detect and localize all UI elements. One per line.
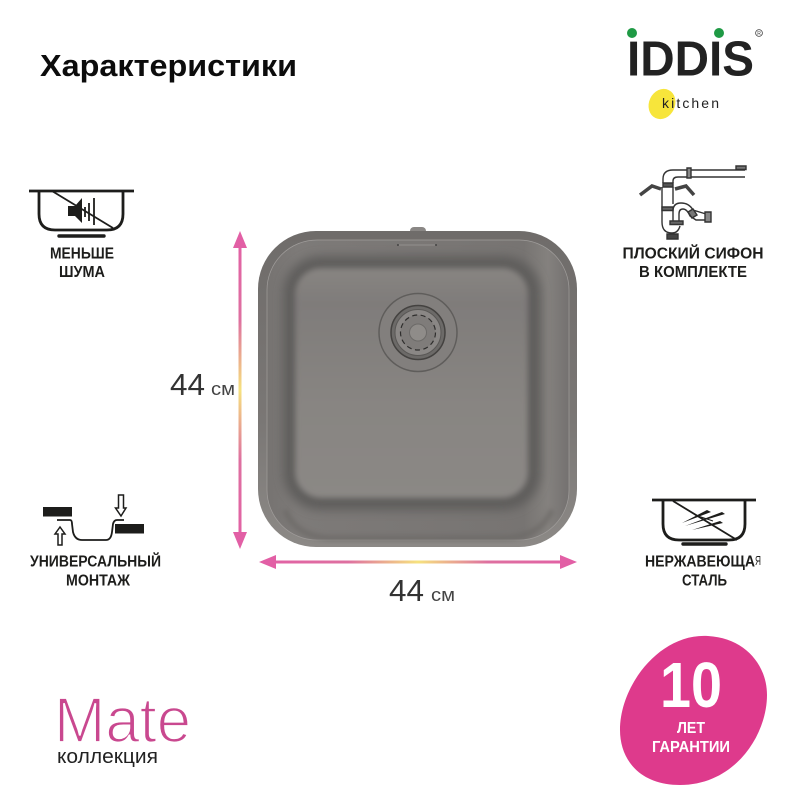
sink illustration — [258, 227, 577, 547]
logo: IDDIS kitchen: IDDIS — [627, 32, 754, 86]
warranty badge — [620, 636, 767, 785]
arrow: width — [259, 555, 577, 569]
arrow: height — [233, 231, 247, 549]
text: flat siphon: ПЛОСКИЙ СИФОН — [622, 244, 764, 262]
logo: IDDIS kitchen — [627, 28, 762, 124]
text: stainless steel: СТАЛЬ — [682, 572, 727, 590]
icon: less noise — [29, 191, 134, 236]
text: universal mounting: УНИВЕРСАЛЬНЫЙ — [30, 552, 161, 570]
text: universal mounting — [30, 552, 161, 590]
text: stainless steel — [645, 553, 761, 590]
text: stainless steel: Я — [755, 553, 761, 568]
label: height 44 cm: 44 — [170, 367, 205, 402]
warranty badge: 10 — [660, 649, 722, 721]
text: less noise — [50, 246, 114, 281]
drain — [379, 294, 457, 372]
label: width 44 cm: 44 — [389, 573, 424, 608]
label: width 44 cm: см — [431, 585, 455, 605]
text: stainless steel: НЕРЖАВЕЮЩА — [645, 554, 755, 570]
logo: IDDIS kitchen: kitchen — [662, 95, 719, 111]
icon: flat siphon — [640, 166, 746, 239]
text: flat siphon — [622, 244, 764, 281]
warranty badge: ГАРАНТИИ — [652, 739, 730, 756]
label: height 44 cm — [170, 367, 235, 402]
label: height 44 cm: см — [211, 379, 235, 399]
icon: stainless steel — [652, 500, 756, 544]
text: flat siphon: В КОМПЛЕКТЕ — [639, 264, 747, 281]
label: width 44 cm — [389, 573, 455, 608]
collection name: Mate — [54, 684, 191, 756]
text: universal mounting: МОНТАЖ — [66, 572, 131, 590]
logo: IDDIS kitchen: R — [757, 31, 761, 37]
text: less noise: МЕНЬШЕ — [50, 246, 114, 262]
collection name: коллекция — [57, 746, 158, 768]
warranty badge: ЛЕТ — [677, 720, 705, 737]
text: less noise: ШУМА — [59, 264, 105, 281]
title: Характеристики — [40, 48, 297, 83]
icon: universal mounting — [43, 495, 144, 545]
